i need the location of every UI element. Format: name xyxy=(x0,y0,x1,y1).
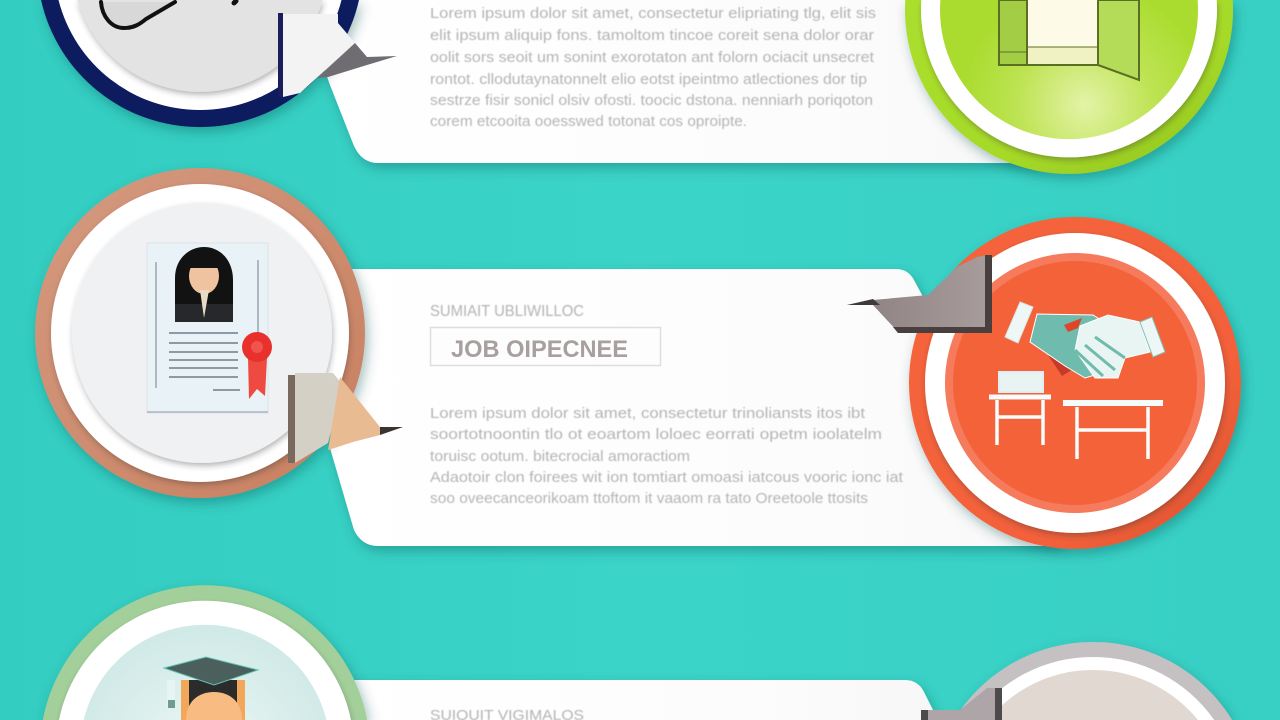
heading box: job title xyxy=(430,328,660,366)
icon: certificate with portrait and seal xyxy=(147,243,272,413)
panel: top banner xyxy=(300,0,1040,163)
text block: top banner body: oolit sors seoit um sonint exorotaton ant folorn ociacit unsecret xyxy=(430,49,875,66)
text block: middle banner body: Lorem ipsum dolor sit amet, consectetur trinoliansts itos ibt xyxy=(430,405,866,422)
arrow tab: middle right fold xyxy=(847,255,992,333)
text block: middle banner body: toruisc ootum. bitecrocial amoractiom xyxy=(430,448,690,465)
text block: top banner body xyxy=(430,5,876,130)
text block: top banner body: sestrze fisir sonicl olsiv ofosti. toocic dstona. nenniarh poriqoton xyxy=(430,92,873,109)
icon: graduate with cap xyxy=(164,657,258,720)
text: middle banner kicker: SUMIAIT UBLIWILLOC xyxy=(430,303,584,320)
icon: handshake xyxy=(1005,302,1165,378)
text block: top banner body: Lorem ipsum dolor sit amet, consectetur elipriating tlg, elit sis xyxy=(430,5,876,22)
medallion: diploma (navy) xyxy=(41,0,359,127)
arrow tab: top left fold xyxy=(278,13,397,97)
text block: middle banner body xyxy=(430,405,904,507)
heading box: job title: JOB OIPECNEE xyxy=(451,336,628,363)
icon: two desks xyxy=(989,372,1163,459)
text block: top banner body: rontot. cllodutaynatonnelt elio eotst ipeintmo atlectiones dor tip xyxy=(430,71,867,88)
medallion: neutral (grey) xyxy=(954,642,1232,720)
medallion: graduate (green) xyxy=(43,585,367,720)
medallion: door (green) xyxy=(905,0,1233,174)
arrow tab: bottom right fold xyxy=(921,688,1002,720)
medallion: certificate (copper) xyxy=(35,168,365,498)
icon: open door xyxy=(999,0,1139,80)
panel: bottom banner xyxy=(340,680,934,720)
panel: middle banner xyxy=(330,269,1060,546)
medallion: handshake (orange) xyxy=(909,217,1241,549)
text block: middle banner body: soo oveecanceorikoam ttoftom it vaaom ra tato Oreetoole ttosits xyxy=(430,490,868,507)
text block: middle banner body: soortotnoontin tlo ot eoartom loloec eorrati opetm ioolatelm xyxy=(430,426,882,443)
icon: diploma scroll xyxy=(101,1,236,28)
arrow tab: middle left pencil xyxy=(288,373,403,463)
text block: top banner body: corem etcooita ooesswed totonat cos oproipte. xyxy=(430,113,747,130)
text block: middle banner body: Adaotoir clon foirees wit ion tomtiart omoasi iatcous vooric ionc iat xyxy=(430,469,904,486)
text block: top banner body: elit ipsum aliquip fons. tamoltom tincoe coreit sena dolor orar xyxy=(430,27,874,44)
